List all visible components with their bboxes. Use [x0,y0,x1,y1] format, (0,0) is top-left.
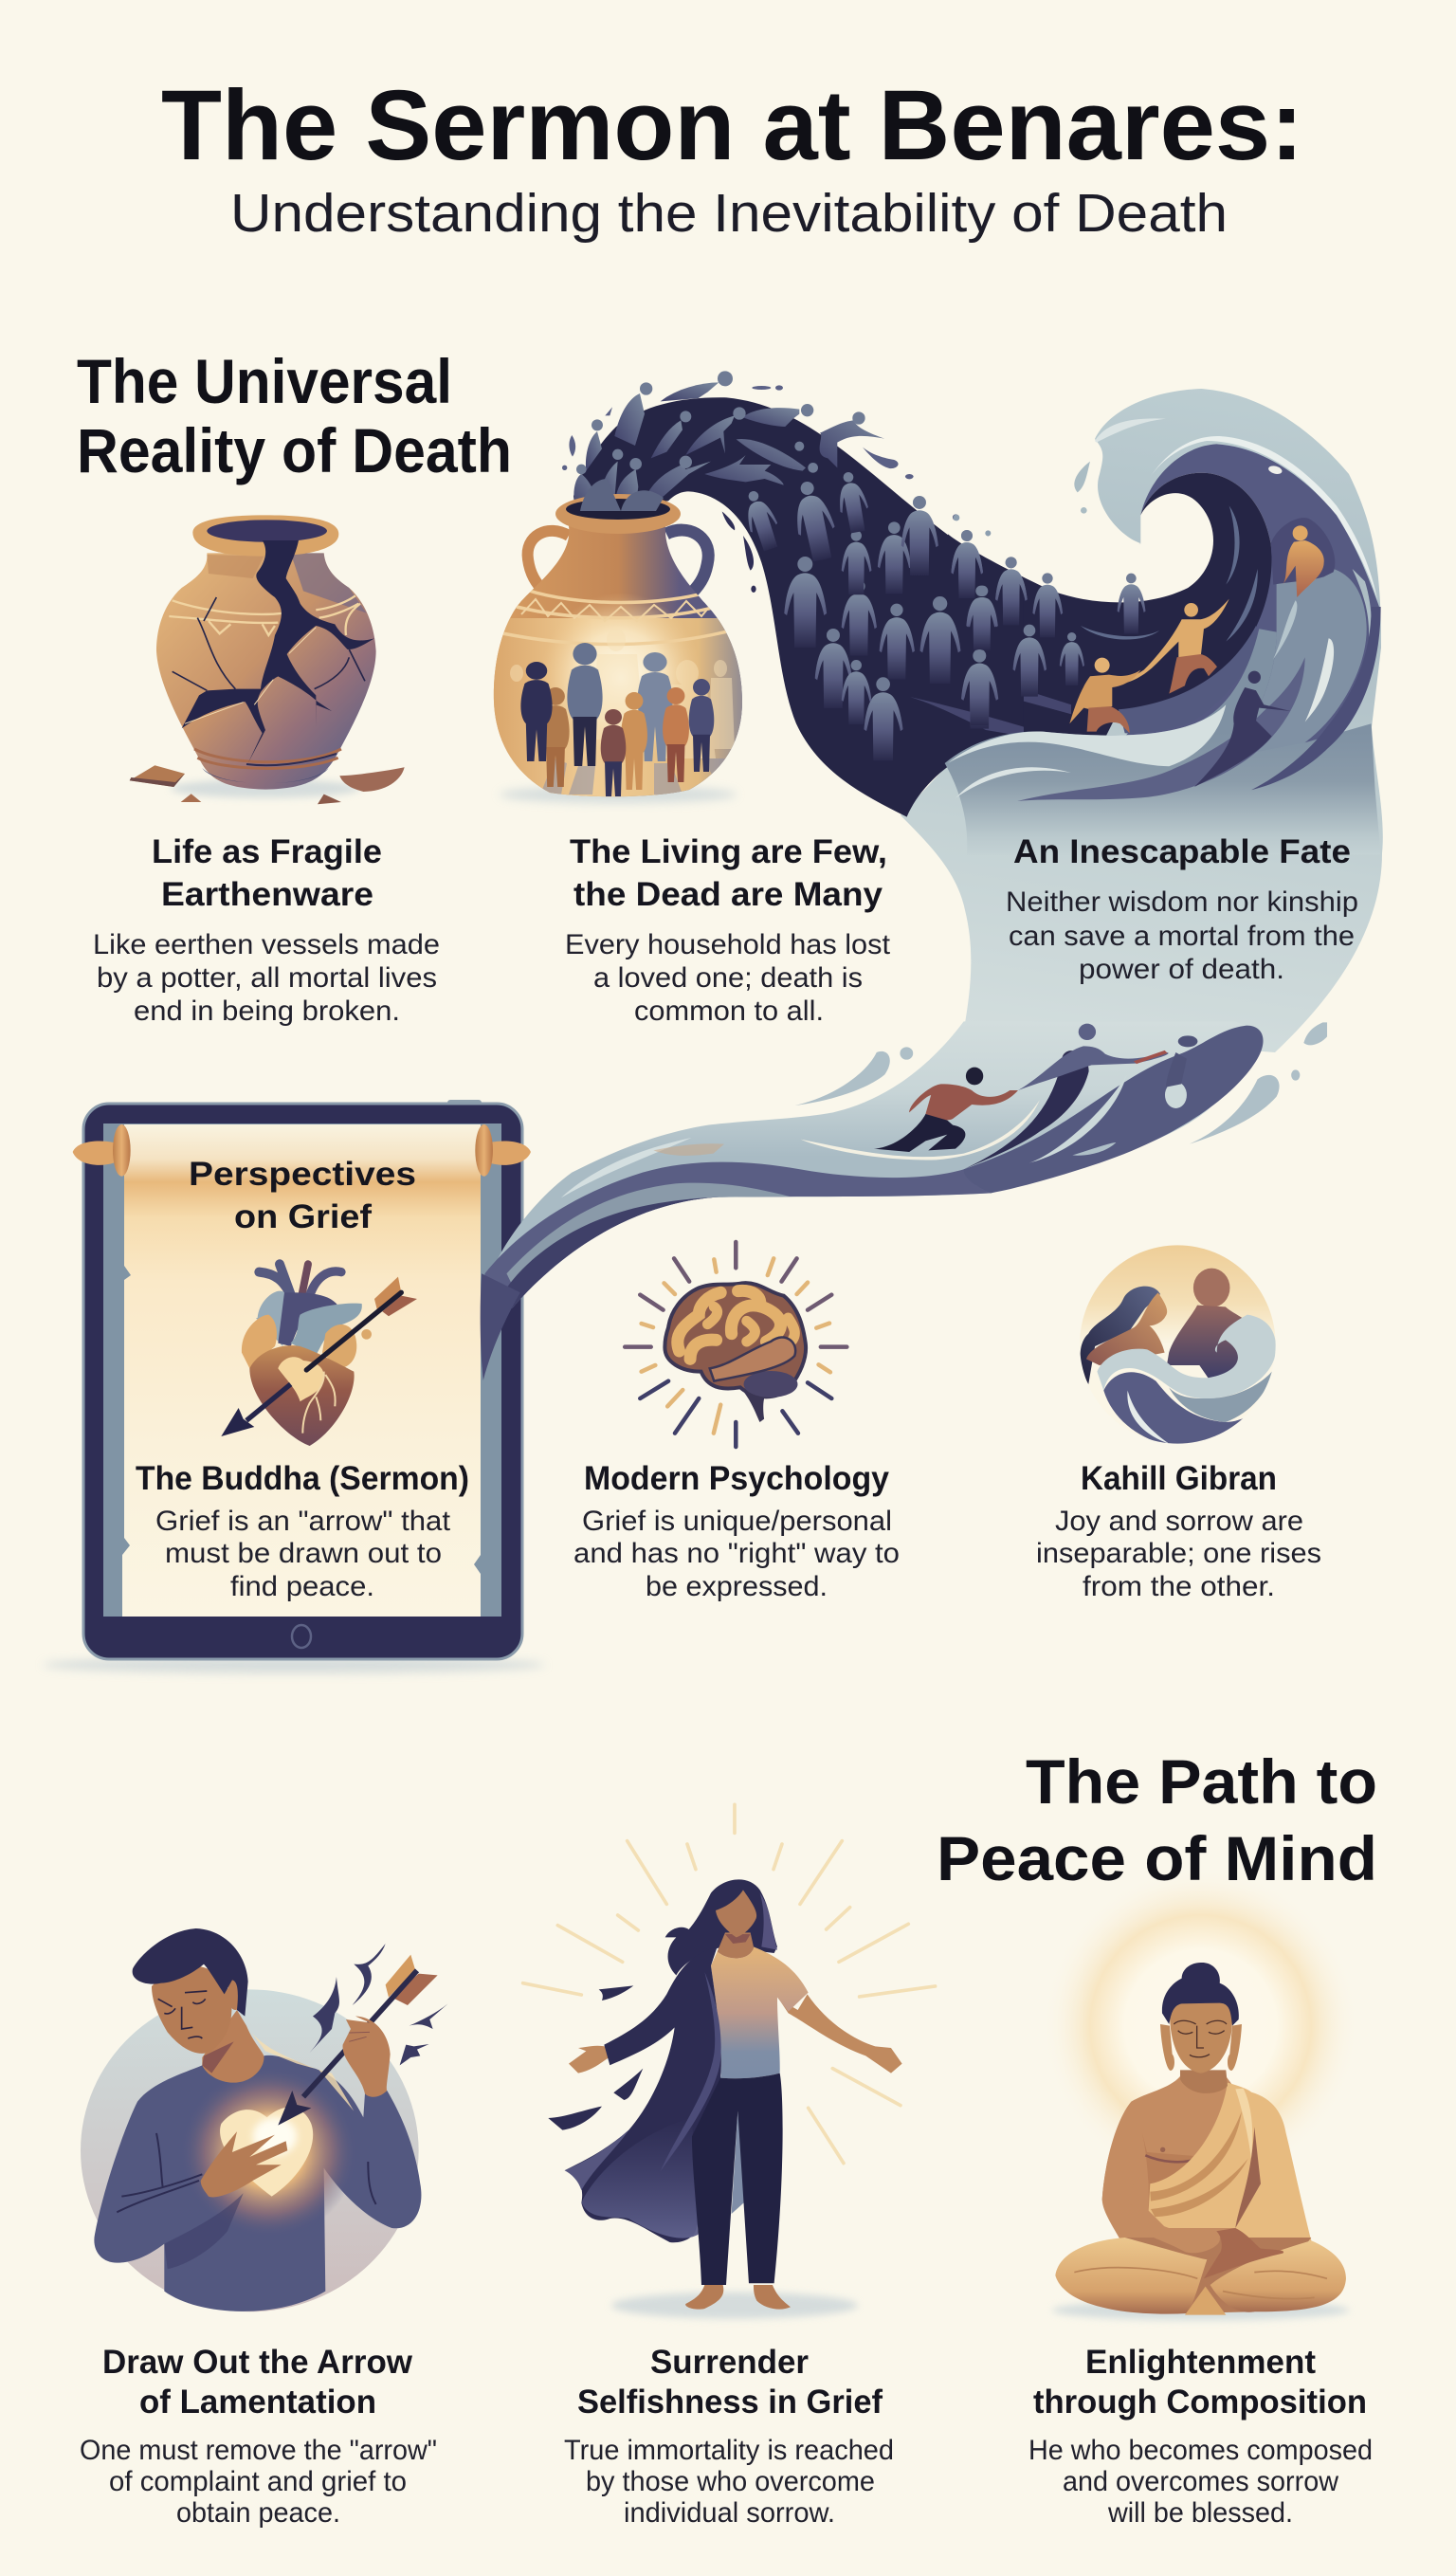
heading: Kahill Gibran [1081,1460,1277,1497]
droplets at crest [954,462,1090,536]
description: of complaint and grief to [109,2466,407,2497]
slate lobes [964,1026,1264,1193]
heading: Life as Fragile [152,833,382,870]
figures near wave crest [945,462,1381,855]
description [564,2435,894,2529]
icon: broken clay vase [130,515,405,804]
dark flow of figures [562,371,1028,817]
heading: The Universal Reality of Death: The Universal [77,346,452,416]
heading: through Composition [1033,2384,1367,2421]
description: Grief is unique/personal [582,1506,892,1537]
ghost figures in crest [951,530,1146,725]
description: and overcomes sorrow [1063,2466,1338,2497]
panel: Surrender Selfishness in Grief [523,1804,936,2529]
description: a loved one; death is [593,962,863,994]
description [1036,1506,1321,1602]
description: end in being broken. [134,996,400,1027]
card: An Inescapable Fate [1006,833,1358,985]
heading: Surrender [650,2344,809,2381]
card: The Buddha (Sermon): Grief is an "arrow" that [155,1506,451,1537]
icon: man drawing arrow from heart [81,1928,448,2311]
runner figure [874,1068,1018,1152]
heading [577,2344,883,2421]
illustration: wave of the dead flowing from pot to tablet [481,371,1383,1380]
scroll paper [73,1124,531,1617]
stream tail against tablet [481,1273,520,1380]
heading: The Universal Reality of Death [77,346,512,485]
heading: Selfishness in Grief [577,2384,883,2421]
title: Understanding the Inevitability of Death [230,183,1228,244]
orange figure: reaching [1119,599,1229,694]
heading [102,2344,413,2421]
card: The Buddha (Sermon): must be drawn out to [165,1538,442,1569]
linked figures [1018,1024,1197,1090]
heading [1033,2344,1367,2421]
heading: the Dead are Many [573,876,883,913]
description [1028,2435,1373,2529]
dark figure on wave [1194,671,1291,787]
description: by a potter, all mortal lives [97,962,437,994]
heading: The Path to Peace of Mind: The Path to [1026,1746,1377,1817]
panel: Life as Fragile Earthenware [93,515,440,1027]
open space inside the curl [1043,473,1271,619]
heading: Earthenware [161,876,373,913]
title [161,70,1303,244]
description: individual sorrow. [624,2497,835,2529]
icon: heart pierced by arrow [221,1264,417,1446]
icon: brain with rays [625,1242,846,1447]
spray of figures above pot [573,382,884,512]
description: Joy and sorrow are [1055,1506,1303,1537]
navy interior [948,473,1272,761]
description [565,929,891,1027]
panel heading: Perspectives on Grief: on Grief [234,1198,372,1235]
arrow shards [310,1944,448,2065]
panel: Draw Out the Arrow of Lamentation [80,1928,448,2529]
foreground swell [945,629,1381,855]
description: be expressed. [646,1571,828,1602]
description [573,1506,900,1602]
description: inseparable; one rises [1036,1538,1321,1569]
shards [130,765,185,787]
title: The Sermon at Benares: [161,70,1303,181]
description: Like eerthen vessels made [93,929,440,960]
panel: Modern Psychology [573,1242,900,1602]
description: True immortality is reached [564,2435,894,2466]
heading [152,833,382,913]
splashes [795,1022,1327,1144]
panel: The Living are Few, the Dead are Many [483,479,891,1027]
icon: pot with family inside [483,479,758,808]
curl and tube [948,418,1379,799]
heading: of Lamentation [139,2384,376,2421]
heading: Enlightenment [1085,2344,1316,2381]
heading: Draw Out the Arrow [102,2344,413,2381]
card: The Buddha (Sermon) [136,1460,469,1602]
card: The Buddha (Sermon): find peace. [230,1571,374,1602]
icon: embracing figures in swirl [1078,1242,1278,1448]
card: The Buddha (Sermon): The Buddha (Sermon) [136,1460,469,1497]
heading: The Living are Few, [570,833,887,870]
orange figure: lower [1069,658,1140,733]
description: by those who overcome [586,2466,875,2497]
card: An Inescapable Fate: An Inescapable Fate [1013,833,1351,870]
description: and has no "right" way to [573,1538,900,1569]
description: Every household has lost [565,929,891,960]
card: An Inescapable Fate: can save a mortal from the [1009,921,1355,952]
heading: Modern Psychology [584,1460,890,1497]
description: obtain peace. [176,2497,340,2529]
orange figure: upper [1283,525,1324,597]
card: An Inescapable Fate: Neither wisdom nor kinship [1006,886,1358,918]
dark swoop figure [964,1050,1089,1169]
heading: The Universal Reality of Death: Reality of Death [77,415,512,485]
droplets [562,385,991,536]
panel: Enlightenment through Composition [1028,1868,1373,2529]
description [93,929,440,1027]
heading [570,833,887,913]
description [80,2435,437,2529]
description: from the other. [1083,1571,1275,1602]
description: will be blessed. [1107,2497,1293,2529]
heading: The Path to Peace of Mind [937,1746,1377,1893]
description: common to all. [634,996,824,1027]
panel heading: Perspectives on Grief: Perspectives [189,1156,416,1193]
heading: The Path to Peace of Mind: Peace of Mind [937,1823,1377,1893]
cloak fragments [548,1985,643,2130]
card: An Inescapable Fate: power of death. [1079,954,1284,985]
stream running to tablet [481,1021,1327,1380]
icon: meditating Buddha with halo [1043,1868,1358,2320]
tablet frame [83,1100,522,1659]
icon: woman shedding dark cloak [523,1804,936,2319]
description: One must remove the "arrow" [80,2435,437,2466]
light wave body [901,389,1383,1052]
panel: tablet with Perspectives on Grief scroll [43,1100,545,1673]
panel heading: Perspectives on Grief [189,1156,416,1235]
panel: Kahill Gibran [1036,1242,1321,1602]
ghost figures in flow [738,469,1028,760]
description: He who becomes composed [1028,2435,1373,2466]
